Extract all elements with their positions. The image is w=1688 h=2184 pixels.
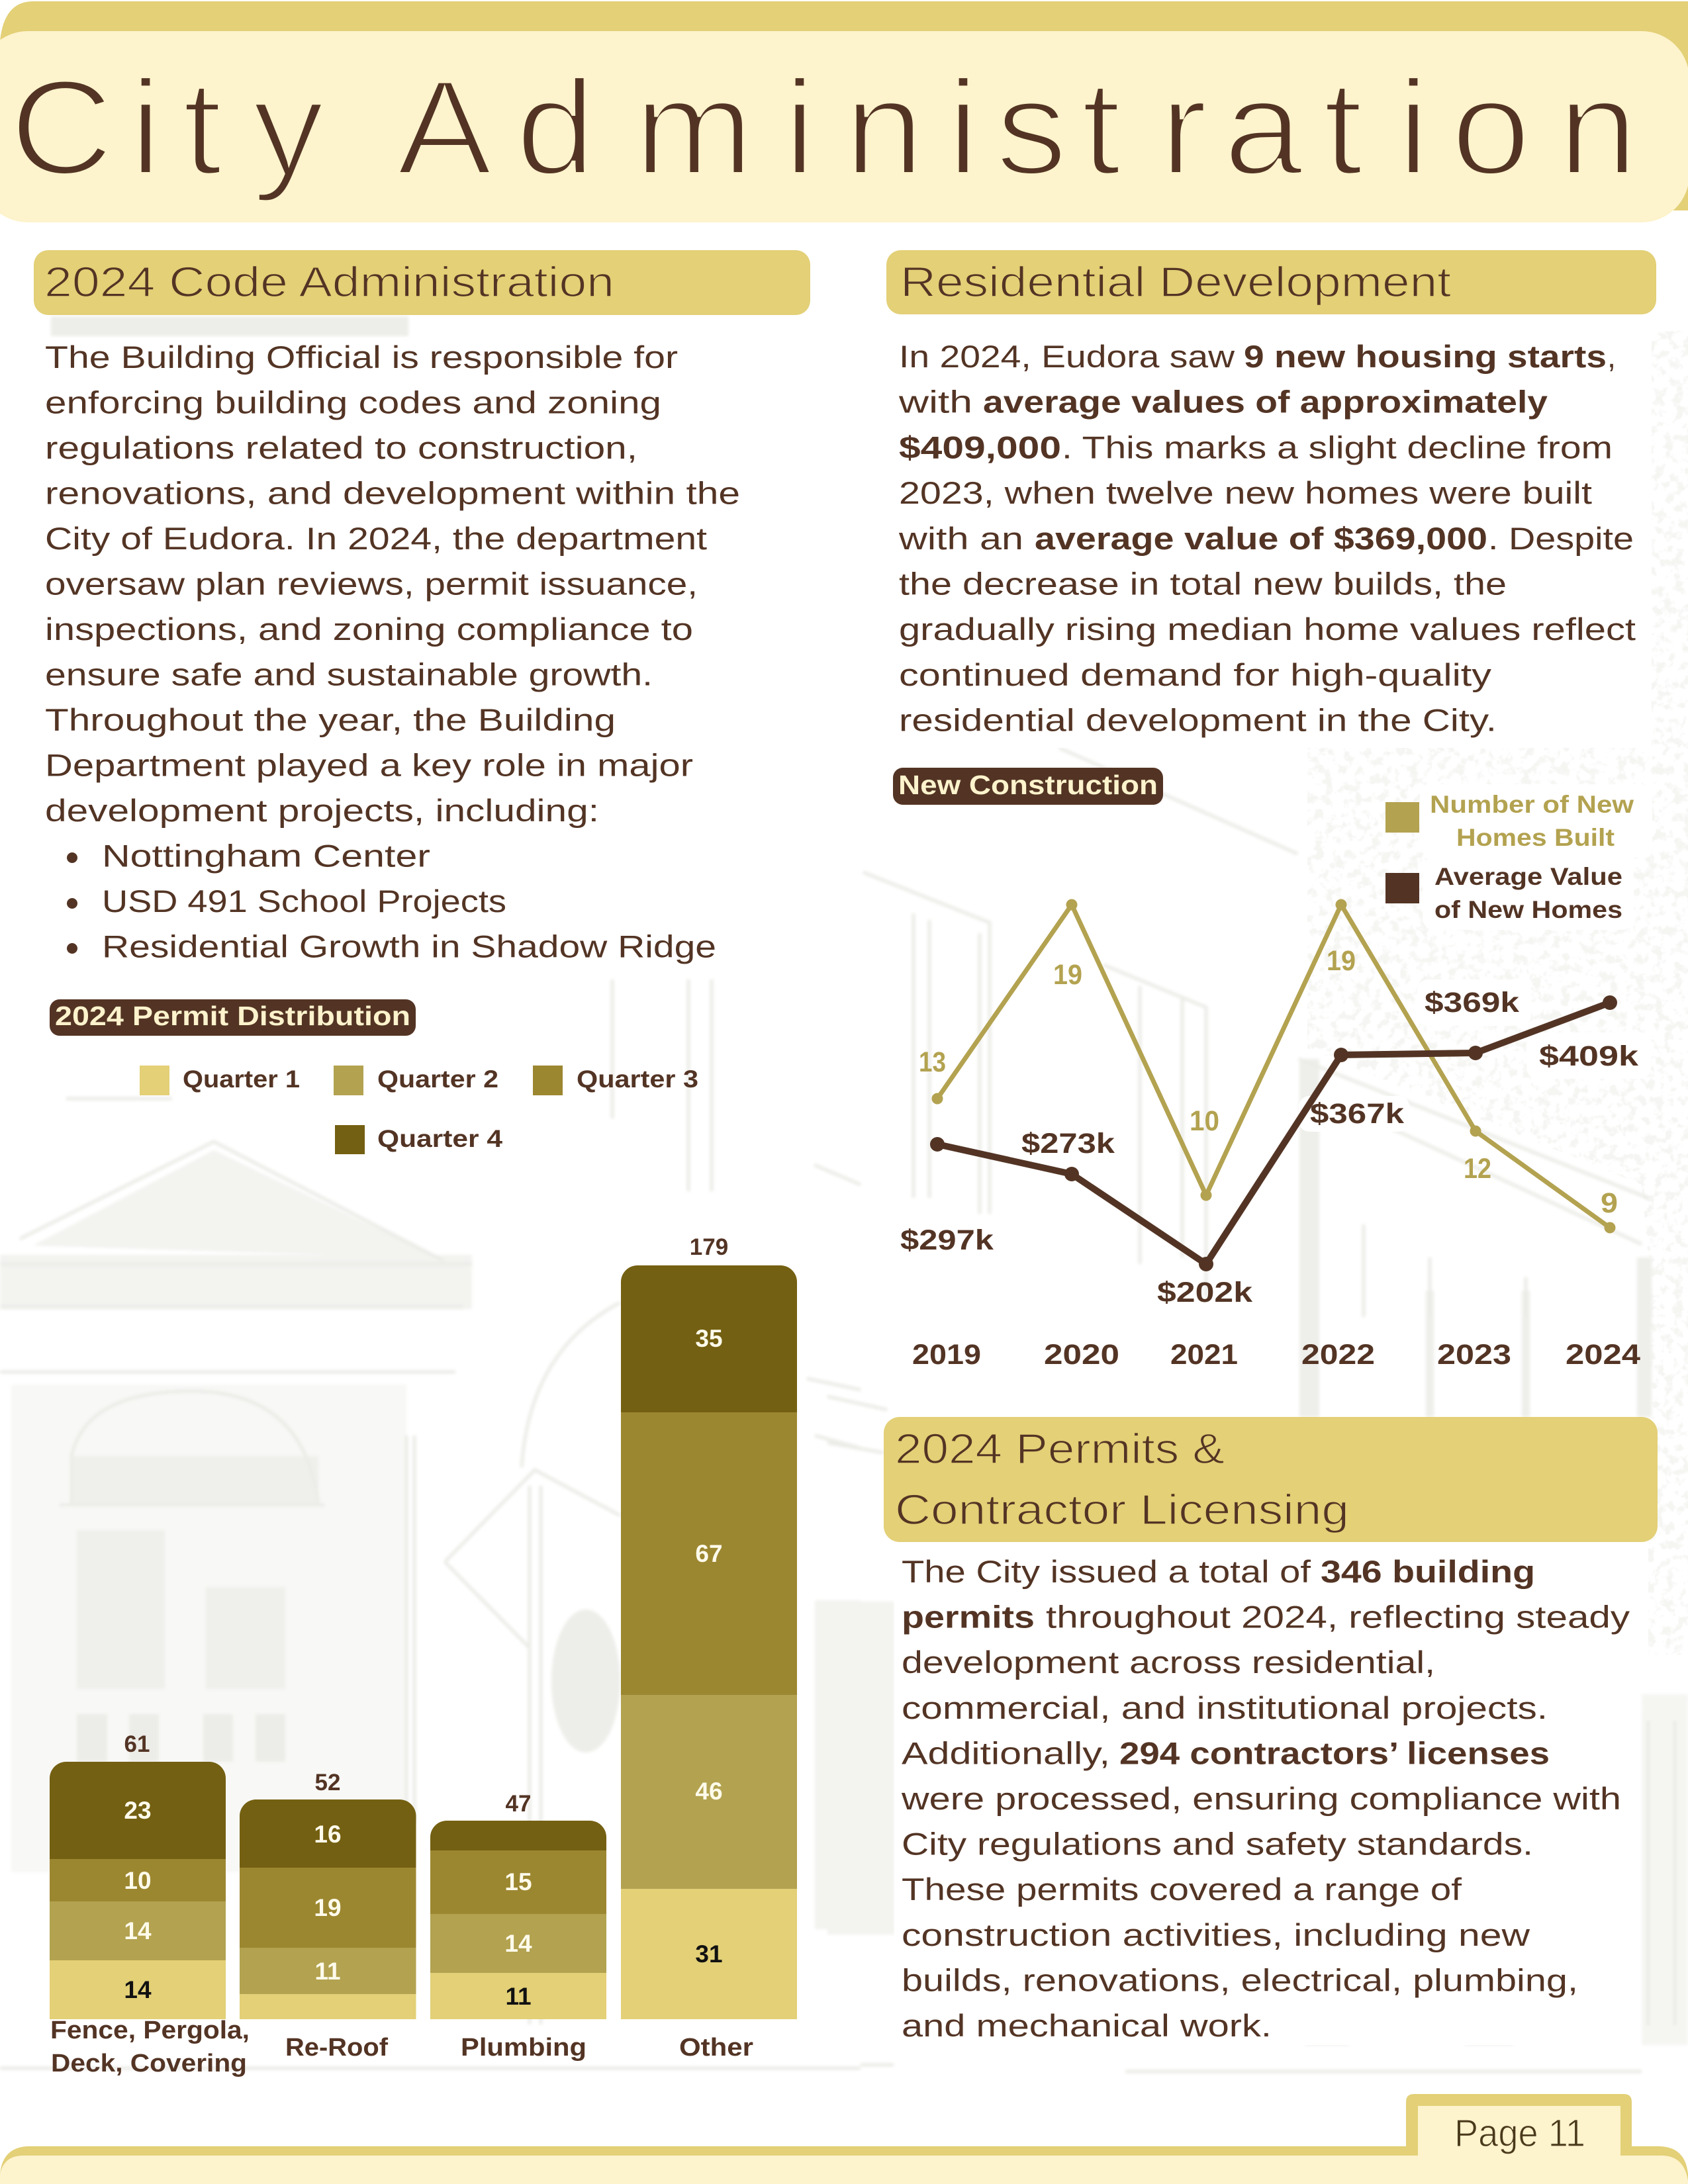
legend: Average Value: [1434, 863, 1622, 890]
bullet list: [67, 838, 716, 964]
title: City Administration: [10, 52, 1638, 203]
body text: City of Eudora. In 2024, the department: [45, 521, 707, 556]
body text: 346 building: [1321, 1554, 1535, 1589]
body text: commercial, and institutional projects.: [902, 1690, 1548, 1725]
body text: throughout 2024, reflecting steady: [1046, 1600, 1630, 1635]
body text: continued demand for high-quality: [899, 657, 1492, 692]
body text: [898, 339, 1636, 738]
heading text: Contractor Licensing: [895, 1486, 1349, 1533]
legend: [140, 1066, 698, 1154]
line chart: number of new homes: 19: [1327, 945, 1356, 977]
heading text: 2024 Permits &: [895, 1425, 1225, 1473]
legend: Number of New: [1430, 791, 1634, 818]
stacked bar: Fence, Pergola, Deck, Covering: Deck, Covering: [51, 2050, 247, 2077]
body text: Department played a key role in major: [45, 748, 693, 782]
panel: 2024 Permit Distribution chart: [50, 999, 797, 2077]
line chart: average value of new homes: [900, 987, 1638, 1308]
stacked bar: Fence, Pergola, Deck, Covering: 14: [124, 1976, 152, 2003]
body text: $409,000: [899, 430, 1061, 465]
body text: . Despite: [1488, 521, 1634, 556]
heading text: [895, 1425, 1349, 1533]
heading bar: [34, 250, 810, 315]
bullet list: Residential Growth in Shadow Ridge: [102, 929, 716, 964]
stacked bar: Other: 46: [695, 1778, 723, 1805]
stacked bar: Plumbing: [430, 1791, 606, 2062]
body text: with: [898, 385, 972, 420]
stacked bar: Re-Roof: 11: [314, 1958, 341, 1985]
header gold backing: [0, 1, 1688, 210]
body text: inspections, and zoning compliance to: [45, 612, 693, 647]
body text: residential development in the City.: [899, 703, 1497, 738]
body text: These permits covered a range of: [902, 1872, 1462, 1907]
heading bar: [884, 1417, 1658, 1542]
body text: average values of approximately: [983, 385, 1548, 420]
legend: of New Homes: [1434, 896, 1622, 923]
stacked bar: Re-Roof: [240, 1770, 416, 2062]
legend: Quarter 3: [577, 1066, 698, 1093]
heading text: Residential Development: [900, 258, 1451, 306]
body text: 2023, when twelve new homes were built: [899, 475, 1592, 510]
stacked bar: Fence, Pergola, Deck, Covering: 14: [124, 1917, 152, 1944]
body text: [901, 1554, 1630, 2043]
panel: 2024 Permits and Contractor Licensing: [884, 1417, 1658, 2043]
line chart: average value of new homes: $367k: [1310, 1098, 1404, 1130]
body text: renovations, and development within the: [45, 475, 740, 511]
stacked bar: Plumbing: 11: [505, 1983, 532, 2010]
x axis years: 2021: [1170, 1339, 1238, 1371]
body text: ,: [1607, 339, 1616, 374]
x axis years: [912, 1339, 1640, 1371]
stacked bar: Plumbing: 15: [504, 1868, 532, 1895]
body text: . This marks a slight decline from: [1062, 430, 1613, 465]
line chart: number of new homes: 9: [1601, 1187, 1618, 1219]
body text: builds, renovations, electrical, plumbing,: [902, 1962, 1578, 1997]
legend: Homes Built: [1456, 824, 1615, 851]
body text: In 2024, Eudora saw: [899, 339, 1235, 374]
line chart: average value of new homes: $369k: [1425, 987, 1519, 1019]
line chart: number of new homes: [919, 899, 1618, 1234]
bullet list: USD 491 School Projects: [102, 884, 506, 919]
stacked bar: Plumbing: Plumbing: [461, 2034, 586, 2062]
stacked bar: Other: 67: [695, 1540, 723, 1567]
body text: construction activities, including new: [902, 1917, 1530, 1952]
bullet list: Nottingham Center: [102, 838, 430, 874]
body text: were processed, ensuring compliance with: [901, 1781, 1621, 1816]
x axis years: 2022: [1301, 1339, 1375, 1371]
heading text: 2024 Code Administration: [44, 258, 614, 306]
panel: Residential Development: [886, 250, 1656, 1371]
footer cream fill: [0, 2106, 1688, 2184]
line chart: number of new homes: 19: [1053, 959, 1082, 991]
stacked bar: Re-Roof: 16: [314, 1821, 342, 1848]
legend: Quarter 1: [183, 1066, 300, 1093]
line chart: number of new homes: 13: [919, 1046, 946, 1078]
stacked bar: Other: Other: [679, 2034, 753, 2062]
line chart: number of new homes: 10: [1190, 1105, 1219, 1137]
stacked bar: Other: 31: [695, 1940, 723, 1968]
stacked bar: Re-Roof: 19: [314, 1894, 342, 1921]
x axis years: 2023: [1437, 1339, 1511, 1371]
footer band with page tab: [0, 2094, 1688, 2184]
stacked bar: Re-Roof: Re-Roof: [285, 2034, 388, 2062]
body text: Additionally,: [902, 1735, 1110, 1770]
stacked bar: Fence, Pergola, Deck, Covering: [50, 1731, 250, 2077]
stacked bar: Fence, Pergola, Deck, Covering: 61: [124, 1731, 150, 1757]
footer gold outline: [0, 2094, 1688, 2184]
line chart: average value of new homes: $273k: [1021, 1128, 1115, 1160]
x axis years: 2020: [1044, 1339, 1119, 1371]
page number: Page 11: [1454, 2112, 1585, 2155]
body text: City regulations and safety standards.: [902, 1827, 1533, 1862]
heading bar: [886, 250, 1656, 314]
body text: oversaw plan reviews, permit issuance,: [45, 567, 698, 601]
body text: and mechanical work.: [902, 2008, 1272, 2043]
stacked bar: Fence, Pergola, Deck, Covering: Fence, Pergola,: [50, 2017, 250, 2044]
x axis years: 2024: [1566, 1339, 1640, 1371]
body text: regulations related to construction,: [45, 430, 637, 465]
x axis years: 2019: [912, 1339, 981, 1371]
stacked bar: Plumbing: 14: [504, 1930, 532, 1957]
body text: average value of $369,000: [1035, 521, 1487, 556]
body text: The City issued a total of: [902, 1554, 1311, 1589]
line chart: number of new homes: 12: [1464, 1153, 1491, 1185]
legend: [1385, 791, 1634, 923]
body text: the decrease in total new builds, the: [899, 567, 1507, 601]
line chart: average value of new homes: $409k: [1539, 1040, 1638, 1072]
body text: enforcing building codes and zoning: [45, 385, 661, 420]
body text: permits: [902, 1600, 1035, 1635]
stacked bar: Fence, Pergola, Deck, Covering: 23: [124, 1797, 152, 1824]
line chart: average value of new homes: $297k: [900, 1224, 994, 1256]
chart title pill: New Construction: [898, 770, 1158, 800]
stacked bar: Other: 179: [690, 1234, 728, 1260]
stacked bar: Other: [621, 1234, 797, 2062]
body text: Throughout the year, the Building: [45, 702, 616, 737]
body text: ensure safe and sustainable growth.: [45, 657, 653, 692]
stacked bar: Other: 35: [695, 1325, 723, 1352]
legend: Quarter 4: [377, 1125, 502, 1152]
body text: with an: [898, 521, 1023, 556]
line chart: average value of new homes: $202k: [1157, 1277, 1252, 1308]
panel: 2024 Code Administration: [34, 250, 810, 964]
header band: [0, 1, 1688, 222]
body text: [45, 340, 740, 828]
stacked bar: Plumbing: 47: [506, 1791, 531, 1817]
body text: gradually rising median home values reflect: [899, 612, 1636, 647]
body text: The Building Official is responsible for: [45, 340, 678, 375]
chart title pill: 2024 Permit Distribution: [55, 1001, 410, 1031]
legend: Quarter 2: [377, 1066, 498, 1093]
stacked bar: Fence, Pergola, Deck, Covering: 10: [124, 1867, 152, 1894]
body text: development across residential,: [902, 1645, 1435, 1680]
header cream panel: [0, 31, 1688, 222]
body text: development projects, including:: [45, 793, 599, 828]
body text: 294 contractors’ licenses: [1119, 1735, 1550, 1770]
stacked bar: Re-Roof: 52: [315, 1770, 340, 1796]
body text: 9 new housing starts: [1244, 339, 1607, 374]
